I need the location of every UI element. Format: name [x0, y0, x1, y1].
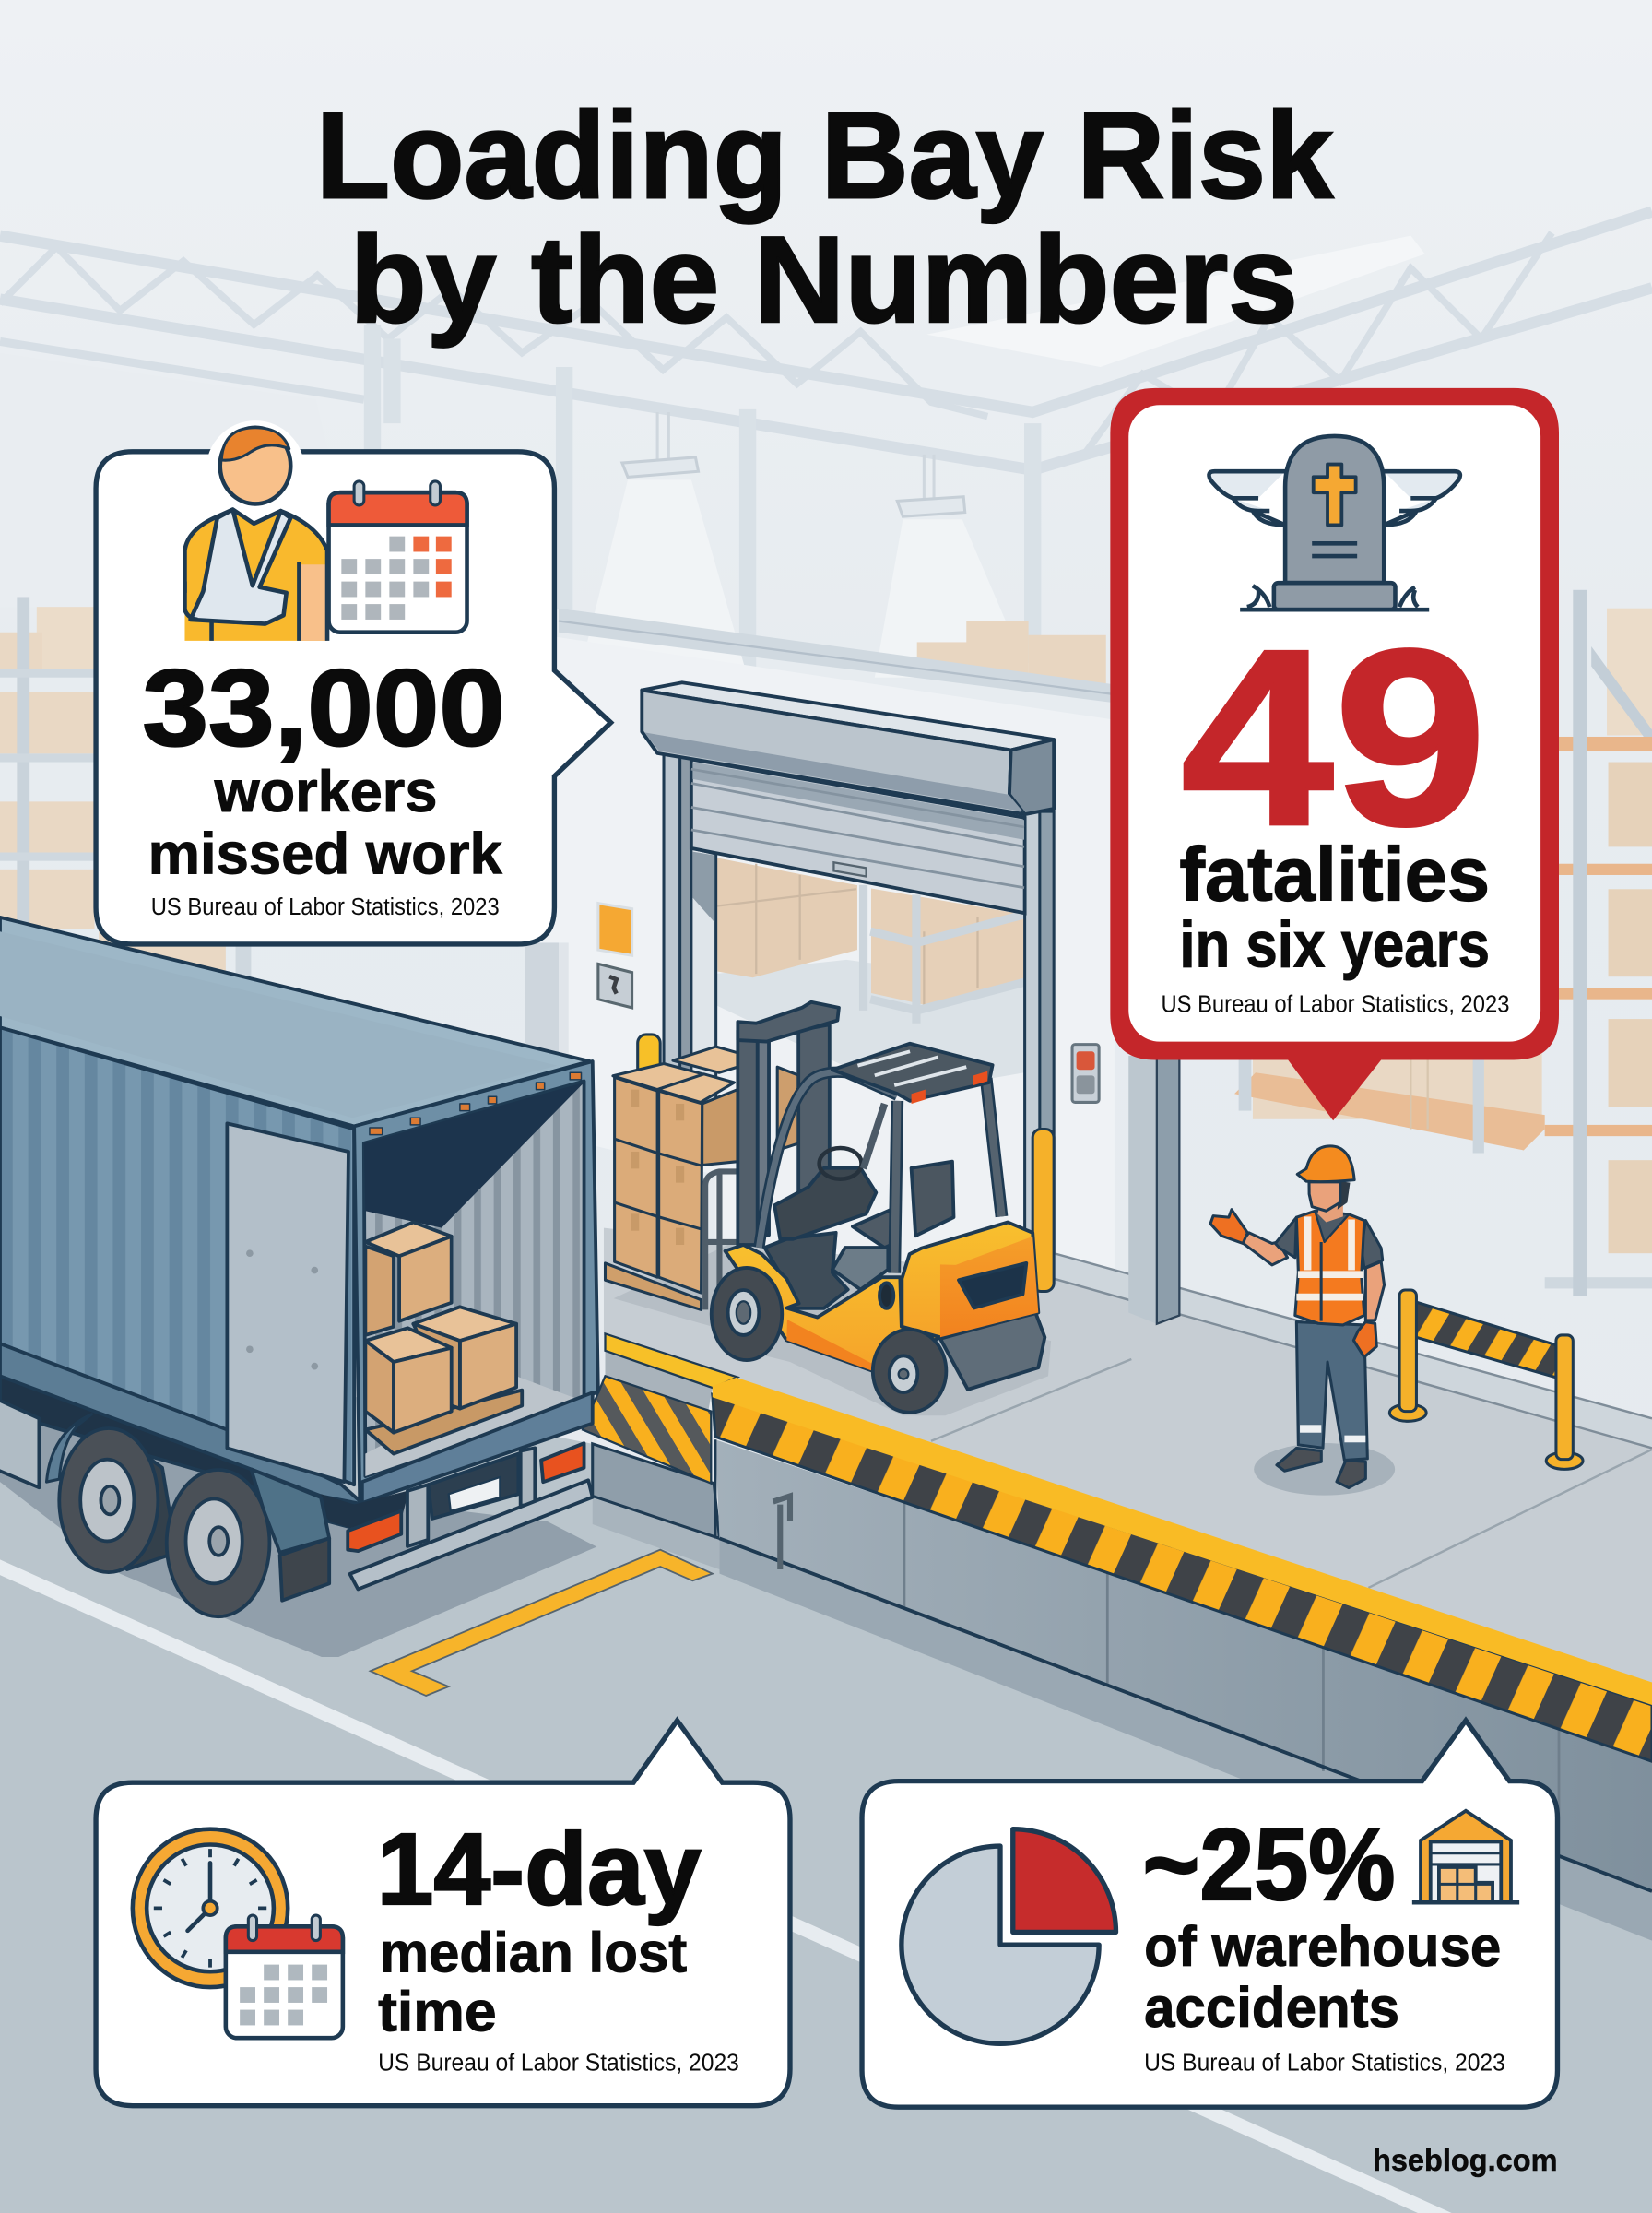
right tail light: [541, 1443, 584, 1482]
front wheel: [712, 1268, 782, 1360]
barrier: [1389, 1290, 1583, 1469]
loading dock door: [642, 682, 1054, 1284]
title: by the Numbers: [350, 211, 1298, 349]
icon: clock: [133, 1829, 288, 1987]
fenders: [47, 1414, 91, 1482]
stat: 33,000: 33,000: [143, 646, 505, 768]
icon: calendar: [329, 481, 467, 633]
brand credit: hseblog.com: [1373, 2144, 1557, 2178]
dock leveler: [583, 1333, 738, 1538]
callout: 49 fatalities: [1110, 388, 1559, 1120]
road white line: [0, 1559, 1452, 2213]
stat: 49: 49: [1181, 597, 1487, 878]
rear wheels: [59, 1428, 269, 1616]
label: of warehouse accidents: accidents: [1144, 1976, 1399, 2039]
chassis gap: [0, 1376, 364, 1527]
wall signs: [598, 904, 1099, 1102]
pallet of boxes on forklift: [606, 1047, 799, 1309]
wall hook: [773, 1496, 790, 1569]
door left frame: [664, 751, 716, 1129]
distant boxes: [917, 621, 1106, 686]
label: workers missed work: workers: [214, 760, 437, 824]
stat: ~25%: ~25%: [1143, 1808, 1395, 1922]
open truck door: [227, 1123, 348, 1482]
door opening with stored boxes: [715, 852, 1025, 1284]
load backrest: [705, 1171, 740, 1309]
label: workers missed work: missed work: [148, 822, 502, 886]
forklift: [705, 1002, 1044, 1413]
back wall: [525, 633, 1115, 1271]
cab floor: [764, 1233, 848, 1308]
label: fatalities in six years: [1179, 832, 1490, 980]
callout: 33,000 workers missed work: [96, 420, 611, 944]
mast: [738, 1002, 839, 1245]
worker shadow: [1254, 1443, 1395, 1496]
right shelving: [1545, 590, 1652, 1296]
dock floor: [604, 1228, 1652, 1694]
cargo boxes: [365, 1223, 522, 1454]
dock wall: [715, 1439, 1652, 1891]
interior: [364, 1081, 584, 1476]
left shelving: [0, 597, 251, 988]
worker legs: [1277, 1322, 1367, 1488]
dock right post: [1128, 1056, 1179, 1324]
stat: 14-day: 14-day: [377, 1813, 702, 1926]
pie chart: [902, 1829, 1115, 2043]
icon: injured worker with sling: [184, 428, 327, 641]
top markers: [370, 1072, 581, 1135]
under-ride frame and plate: [428, 1454, 518, 1519]
source: US Bureau of Labor Statistics, 2023: [151, 893, 500, 920]
truck roof: [0, 917, 590, 1126]
label: of warehouse accidents: [1144, 1915, 1501, 2039]
side box: [0, 1399, 39, 1487]
hazard edge band: [713, 1378, 1652, 1761]
callout: ~25% of warehouse accidents: [862, 1721, 1557, 2107]
title: [316, 87, 1334, 349]
icon: winged tombstone: [1209, 436, 1460, 609]
seat and dash: [912, 1162, 953, 1236]
yellow parking mark: [371, 1550, 713, 1696]
side rail: [0, 1343, 364, 1505]
overhead guard pillars: [759, 1072, 897, 1248]
truck shadow: [0, 1412, 596, 1657]
bollards: [638, 1035, 1054, 1292]
head and hard hat: [1297, 1146, 1354, 1223]
truck side: [0, 1027, 354, 1485]
source: US Bureau of Labor Statistics, 2023: [1144, 2048, 1505, 2076]
bumper: [350, 1480, 593, 1589]
icon: warehouse: [1412, 1811, 1519, 1902]
counterweight: [940, 1312, 1044, 1390]
label: median lost time: time: [378, 1981, 497, 2043]
label: of warehouse accidents: of warehouse: [1144, 1915, 1501, 1978]
label: median lost time: [378, 1921, 687, 2043]
rear wedge: [321, 1490, 409, 1528]
source: US Bureau of Labor Statistics, 2023: [378, 2048, 739, 2076]
rear sill: [362, 1392, 593, 1503]
door right frame: [1025, 811, 1054, 1279]
worker arms: [1210, 1210, 1385, 1357]
label: fatalities in six years: fatalities: [1179, 832, 1490, 917]
rear body: [902, 1223, 1038, 1337]
label: median lost time: median lost: [380, 1921, 687, 1983]
overhead guard roof: [832, 1044, 993, 1101]
road surface: [0, 1327, 1652, 2213]
label: workers missed work: [148, 760, 502, 886]
ceiling lights: [578, 412, 1030, 678]
truck: [0, 917, 598, 1616]
label: fatalities in six years: in six years: [1179, 907, 1490, 980]
source: US Bureau of Labor Statistics, 2023: [1161, 989, 1509, 1017]
safety vest: [1295, 1211, 1364, 1325]
rear wheel: [873, 1330, 946, 1413]
title: Loading Bay Risk: [316, 87, 1334, 224]
worker: [1210, 1146, 1395, 1496]
yellow body side: [726, 1245, 940, 1371]
left tail light: [348, 1511, 401, 1551]
door header box: [642, 682, 1054, 814]
shelving below red callout: [1234, 1051, 1545, 1154]
rear frame: [354, 1061, 598, 1499]
roller shutter: [691, 759, 1025, 913]
callout: 14-day median lost time: [96, 1721, 790, 2106]
icon: calendar: [226, 1915, 343, 2038]
